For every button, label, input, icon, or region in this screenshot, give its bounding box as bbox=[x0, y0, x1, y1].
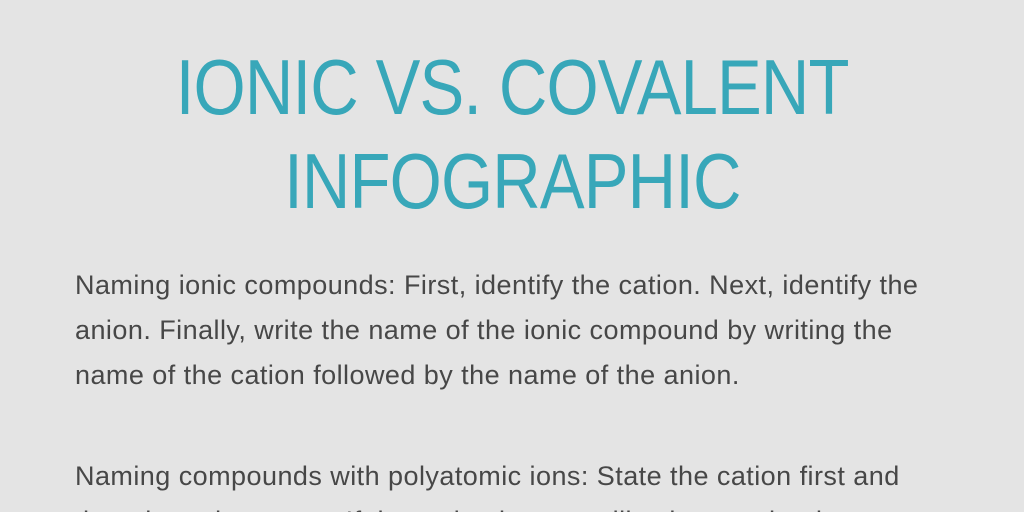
text block: naming ionic compounds: anion. Finally, write the name of the ionic compound by writing the bbox=[75, 315, 893, 345]
text block: naming ionic compounds bbox=[75, 270, 918, 390]
text block: polyatomic ions bbox=[75, 461, 900, 512]
title bbox=[176, 43, 848, 225]
title: INFOGRAPHIC bbox=[284, 137, 740, 225]
text block: naming ionic compounds: Naming ionic compounds: First, identify the cation. Next, identify the bbox=[75, 270, 918, 300]
text block: naming ionic compounds: name of the cation followed by the name of the anion. bbox=[75, 360, 740, 390]
title: IONIC VS. COVALENT bbox=[176, 43, 848, 131]
text block: polyatomic ions: Naming compounds with polyatomic ions: State the cation first and bbox=[75, 461, 900, 491]
